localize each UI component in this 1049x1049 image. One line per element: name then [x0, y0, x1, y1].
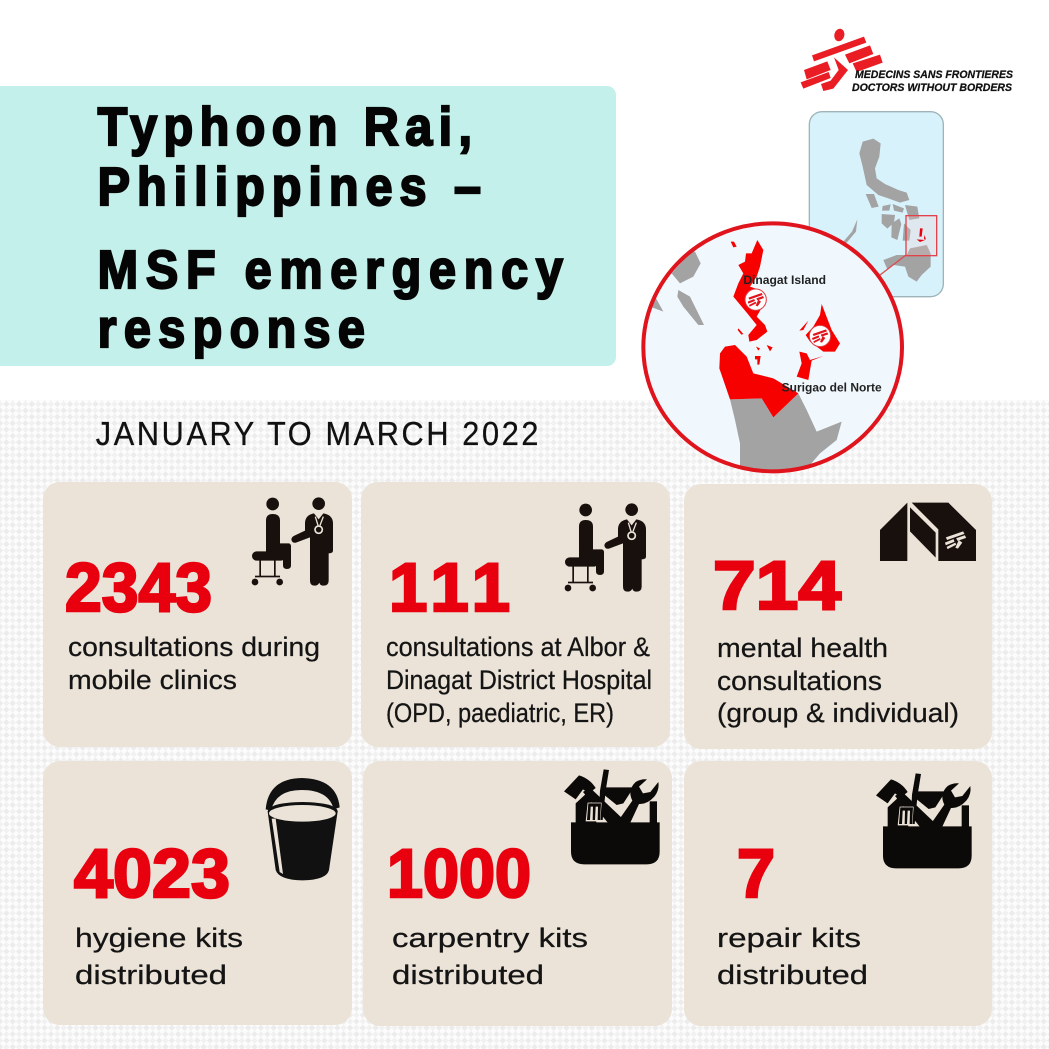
title text: MSF emergency: [98, 239, 563, 300]
inset map of the Philippines: [809, 112, 943, 297]
title text: response: [98, 298, 365, 359]
description: mental health: [717, 633, 888, 663]
description: [68, 632, 320, 695]
description: [386, 632, 652, 728]
red affected areas: [719, 240, 840, 417]
icon: toolbox: [876, 773, 972, 868]
description: distributed: [717, 960, 868, 990]
description: mobile clinics: [68, 665, 237, 695]
card: repair kits: [684, 761, 992, 1026]
description: consultations at Albor &: [386, 632, 650, 662]
map: Philippines inset and zoomed circle: [643, 112, 943, 477]
description: carpentry kits: [392, 923, 588, 953]
number: 111: [389, 549, 510, 626]
description: distributed: [75, 960, 227, 990]
icon: bucket: [266, 778, 340, 880]
label: Dinagat Island: Dinagat Island: [743, 273, 826, 287]
MSF site marker: Dinagat: [745, 289, 766, 310]
title text: Typhoon Rai,: [98, 96, 472, 157]
patterned background: [0, 400, 1049, 1049]
description: consultations during: [68, 632, 320, 662]
title panel: [0, 86, 616, 366]
description: [75, 923, 243, 990]
logo wordmark: [852, 69, 1014, 94]
description: repair kits: [717, 923, 861, 953]
card: mobile clinics: [43, 482, 352, 747]
MSF site marker: Siargao: [809, 325, 831, 347]
icon: toolbox: [564, 769, 660, 864]
logo wordmark: DOCTORS WITHOUT BORDERS: [852, 82, 1013, 94]
MSF logo: [801, 28, 1014, 94]
description: Dinagat District Hospital: [386, 665, 652, 695]
description: (OPD, paediatric, ER): [386, 698, 614, 728]
description: [717, 633, 959, 728]
zoomed circle map: [643, 223, 902, 477]
card: hospital consultations: [361, 482, 670, 747]
icon: doctor and patient: [252, 497, 333, 586]
grey land: [650, 252, 842, 477]
description: [717, 923, 868, 990]
description: (group & individual): [717, 698, 959, 728]
logo wordmark: MEDECINS SANS FRONTIERES: [855, 69, 1014, 81]
description: [392, 923, 588, 990]
label: Surigao del Norte: Surigao del Norte: [782, 381, 882, 395]
number: 4023: [74, 835, 230, 912]
icon: MSF tent: [880, 503, 976, 561]
card: carpentry kits: [363, 761, 672, 1026]
number: 714: [713, 547, 841, 624]
description: hygiene kits: [75, 923, 243, 953]
description: consultations: [717, 666, 882, 696]
description: distributed: [392, 960, 544, 990]
card: hygiene kits: [43, 761, 352, 1025]
number: 1000: [387, 835, 531, 912]
title text: [98, 96, 563, 359]
icon: doctor and patient: [565, 503, 646, 592]
number: 7: [737, 835, 775, 912]
logo emblem: [801, 28, 883, 91]
number: 2343: [65, 549, 212, 626]
card: mental health: [684, 484, 992, 749]
date subtitle: JANUARY TO MARCH 2022: [96, 415, 538, 452]
title text: Philippines –: [98, 156, 481, 217]
